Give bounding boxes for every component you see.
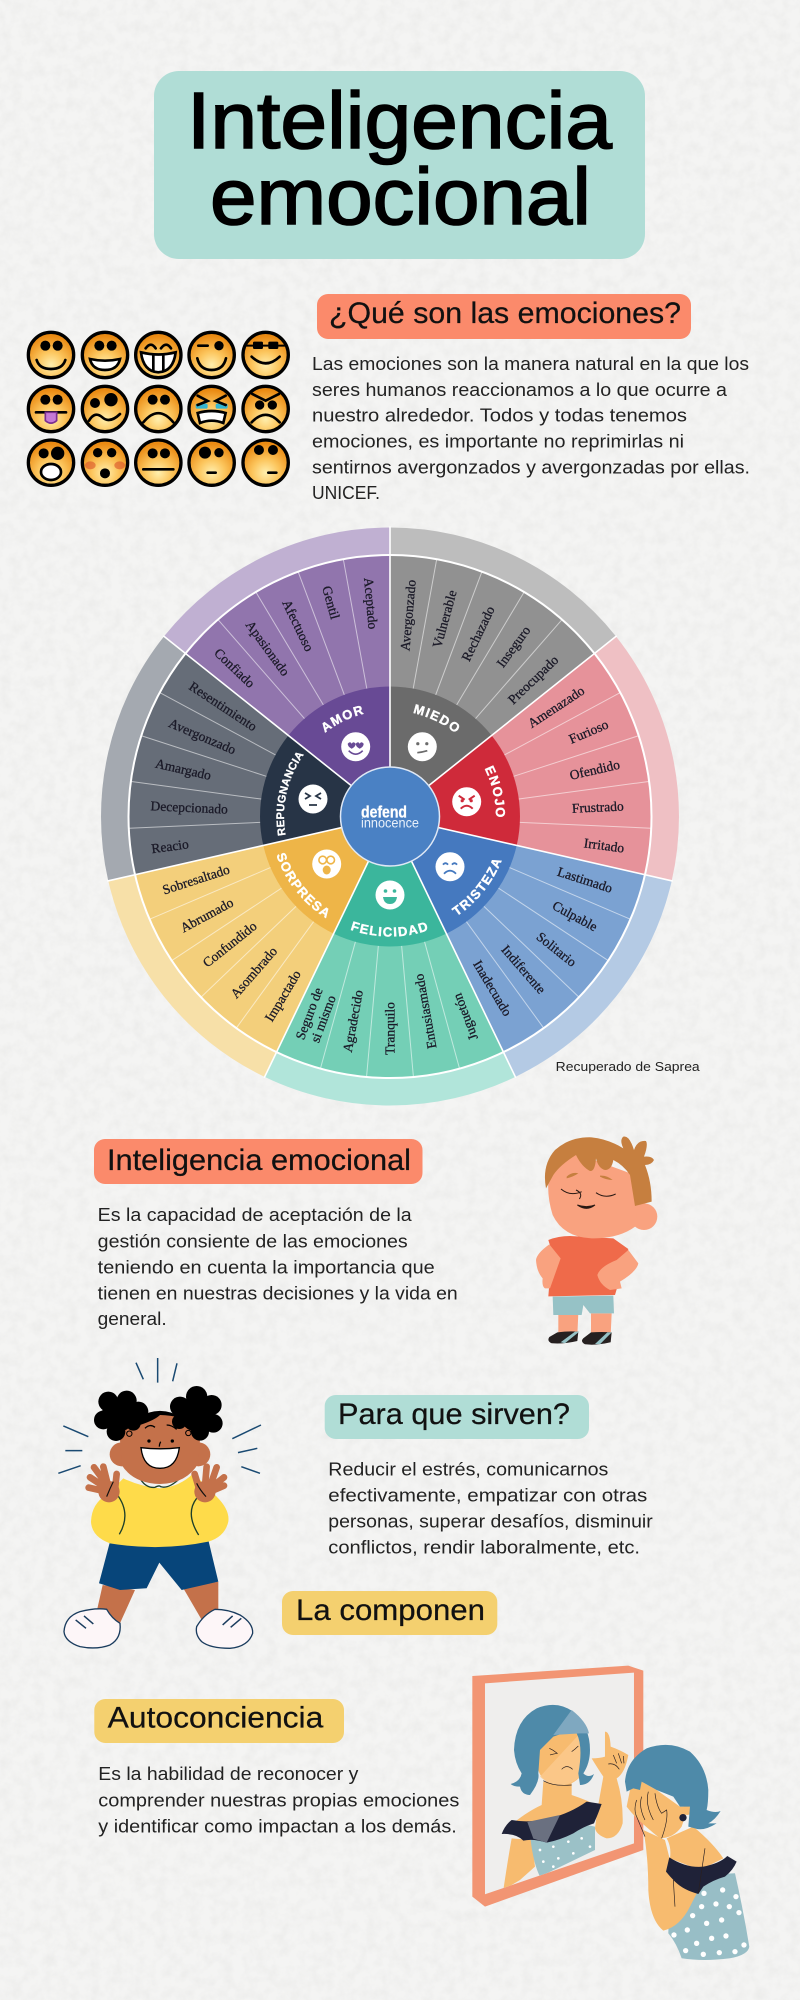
heading: Inteligencia emocional: Inteligencia emocional <box>107 1144 411 1177</box>
woman in front of mirror <box>625 1745 749 1960</box>
labels: miedo: Inseguro <box>493 623 534 670</box>
icon: neutral <box>136 440 181 485</box>
labels: miedo: Rechazado <box>458 603 498 664</box>
labels: miedo: Preocupado <box>505 652 562 707</box>
category names on arcs: REPUGNANCIA <box>276 752 304 836</box>
text: what it is for <box>328 1460 653 1557</box>
category names on arcs <box>276 704 506 937</box>
text: emotional intelligence definition: Es la capacidad de aceptación de la <box>98 1205 413 1225</box>
reflection <box>502 1705 628 1890</box>
heading: ¿Qué son las emociones?: ¿Qué son las emociones? <box>329 297 681 330</box>
illustration: woman and mirror <box>472 1666 749 1960</box>
icon: smile <box>28 332 74 378</box>
icon: crying <box>189 386 234 432</box>
text: definition of emotions: Las emociones son la manera natural en la que los <box>312 354 749 374</box>
labels: sorpresa: Confundido <box>200 918 260 970</box>
icon: wink <box>189 332 234 378</box>
center logo: defend innocence: defend <box>361 802 407 822</box>
icon: shocked <box>28 440 74 485</box>
mirror frame <box>472 1666 643 1907</box>
icon: grid of emoji faces <box>28 332 288 485</box>
labels: felicidad: Seguro de <box>292 985 325 1042</box>
text: self-awareness definition <box>98 1764 459 1836</box>
labels: amor: Confiado <box>211 645 258 691</box>
text: what it is for: Reducir el estrés, comunicarnos <box>328 1460 608 1480</box>
text: emotional intelligence definition: teniendo en cuenta la importancia que <box>98 1257 435 1277</box>
icon: grin <box>136 332 181 378</box>
labels: repugnancia: Reacio <box>150 836 190 856</box>
labels: tristeza <box>470 864 615 1019</box>
icon: sunglasses <box>243 332 288 378</box>
title: emocional <box>210 152 591 241</box>
text: definition of emotions: sentirnos avergonzados y avergonzadas por ellas. <box>312 457 750 477</box>
icon: felicidad face <box>376 880 404 910</box>
title <box>154 71 645 259</box>
text: emotional intelligence definition: gestión consiente de las emociones <box>98 1231 408 1251</box>
labels: tristeza: Lastimado <box>556 864 615 896</box>
center logo: defend innocence: innocence <box>361 814 419 830</box>
text: emotional intelligence definition: general. <box>98 1309 167 1329</box>
text: emotional intelligence definition <box>98 1205 458 1329</box>
labels: amor: Afectuoso <box>279 597 317 654</box>
text: what it is for: conflictos, rendir laboralmente, etc. <box>328 1537 640 1557</box>
labels: amor <box>211 577 381 691</box>
labels: miedo <box>397 579 562 707</box>
text: definition of emotions <box>312 354 750 503</box>
labels: amor: Apasionado <box>243 618 293 679</box>
sector: amor <box>164 460 531 816</box>
labels: enojo: Frustrado <box>572 799 624 816</box>
category names on arcs: FELICIDAD <box>350 921 428 937</box>
chart: emotion wheel <box>101 526 679 1106</box>
source note: Recuperado de Saprea <box>556 1059 701 1074</box>
labels: sorpresa: Abrumado <box>178 895 236 935</box>
icon: sad <box>136 386 181 432</box>
icon: small mouth <box>189 440 234 485</box>
labels: repugnancia <box>150 679 260 856</box>
labels: tristeza: Solitario <box>534 929 580 970</box>
text: self-awareness definition: comprender nuestras propias emociones <box>98 1790 459 1810</box>
illustration: happy girl <box>58 1358 261 1648</box>
labels: felicidad: Juguetón <box>450 991 481 1042</box>
heading: La componen: La componen <box>296 1594 485 1627</box>
category names on arcs: MIEDO <box>413 704 460 732</box>
icon: tongue out <box>28 386 74 432</box>
labels: sorpresa: Impactado <box>262 967 304 1024</box>
text: definition of emotions: seres humanos reaccionamos a lo que ocurre a <box>312 380 728 400</box>
labels: sorpresa <box>160 862 304 1024</box>
icon: tristeza face <box>436 852 464 881</box>
icon: miedo face <box>408 732 437 761</box>
text: emotional intelligence definition: tienen en nuestras decisiones y la vida en <box>98 1283 458 1303</box>
category names on arcs: SORPRESA <box>277 852 328 918</box>
text: what it is for: personas, superar desafíos, disminuir <box>328 1512 653 1532</box>
heading: La componen <box>282 1591 497 1635</box>
labels: tristeza: Inadecuado <box>470 958 515 1019</box>
sector: enojo <box>390 636 757 993</box>
text: self-awareness definition: y identificar como impactan a los demás. <box>98 1816 457 1836</box>
labels: repugnancia: Avergonzado <box>167 715 238 757</box>
icon: repugnancia face <box>298 784 328 814</box>
labels: repugnancia: Amargado <box>154 756 213 783</box>
labels: enojo: Irritado <box>583 835 625 856</box>
icon: blushing <box>82 440 128 485</box>
labels: felicidad <box>292 972 481 1055</box>
heading: ¿Qué son las emociones? <box>317 294 691 339</box>
heading: Autoconciencia: Autoconciencia <box>108 1702 324 1734</box>
title: Inteligencia <box>187 76 613 165</box>
icon: angry <box>243 386 288 432</box>
sector: miedo <box>390 528 616 816</box>
category names on arcs: AMOR <box>322 706 364 733</box>
labels: felicidad: Entusiasmado <box>411 972 440 1050</box>
labels: enojo <box>525 683 625 856</box>
text: self-awareness definition: Es la habilidad de reconocer y <box>98 1764 358 1784</box>
labels: tristeza: Culpable <box>550 898 600 934</box>
text: definition of emotions: UNICEF. <box>312 483 380 503</box>
labels: enojo: Furioso <box>567 717 611 747</box>
labels: repugnancia: Resentimiento <box>186 679 260 734</box>
labels: felicidad: Tranquilo <box>382 1002 398 1055</box>
sector: felicidad <box>186 816 515 1175</box>
labels: enojo: Ofendido <box>568 757 621 783</box>
labels: felicidad: Agradecido <box>340 989 366 1053</box>
labels: miedo: Avergonzado <box>397 579 419 652</box>
heading: Para que sirven?: Para que sirven? <box>338 1398 570 1431</box>
heading: Para que sirven? <box>325 1395 589 1439</box>
text: definition of emotions: emociones, es importante no reprimirlas ni <box>312 431 684 451</box>
icon: confused <box>82 386 128 432</box>
labels: felicidad: si mismo <box>307 993 338 1044</box>
labels: amor: Gentil <box>319 584 343 621</box>
labels: amor: Aceptado <box>361 577 381 630</box>
icon: amor face <box>341 732 370 761</box>
icon: open smile <box>82 332 128 378</box>
labels: enojo: Amenazado <box>525 683 587 731</box>
icon: enojo face <box>452 787 481 816</box>
icon: looking up <box>243 440 288 485</box>
text: what it is for: efectivamente, empatizar con otras <box>328 1486 647 1506</box>
heading: Autoconciencia <box>94 1699 344 1743</box>
sector: sorpresa <box>61 719 390 1077</box>
category names on arcs: ENOJO <box>484 765 506 817</box>
center logo: defend innocence <box>340 767 440 866</box>
labels: sorpresa: Sobresaltado <box>160 862 232 897</box>
labels: sorpresa: Asombrado <box>227 944 280 1001</box>
illustration: boy with eyes closed <box>536 1136 657 1345</box>
sector: tristeza <box>340 816 672 1101</box>
labels: tristeza: Indiferente <box>498 942 549 997</box>
text: definition of emotions: nuestro alrededor. Todos y todas tenemos <box>312 406 687 426</box>
icon: sorpresa face <box>312 850 341 878</box>
sector: repugnancia <box>58 596 390 881</box>
labels: miedo: Vulnerable <box>429 588 460 649</box>
category names on arcs: TRISTEZA <box>451 860 502 915</box>
heading: Inteligencia emocional <box>94 1139 422 1184</box>
labels: repugnancia: Decepcionado <box>150 798 228 817</box>
